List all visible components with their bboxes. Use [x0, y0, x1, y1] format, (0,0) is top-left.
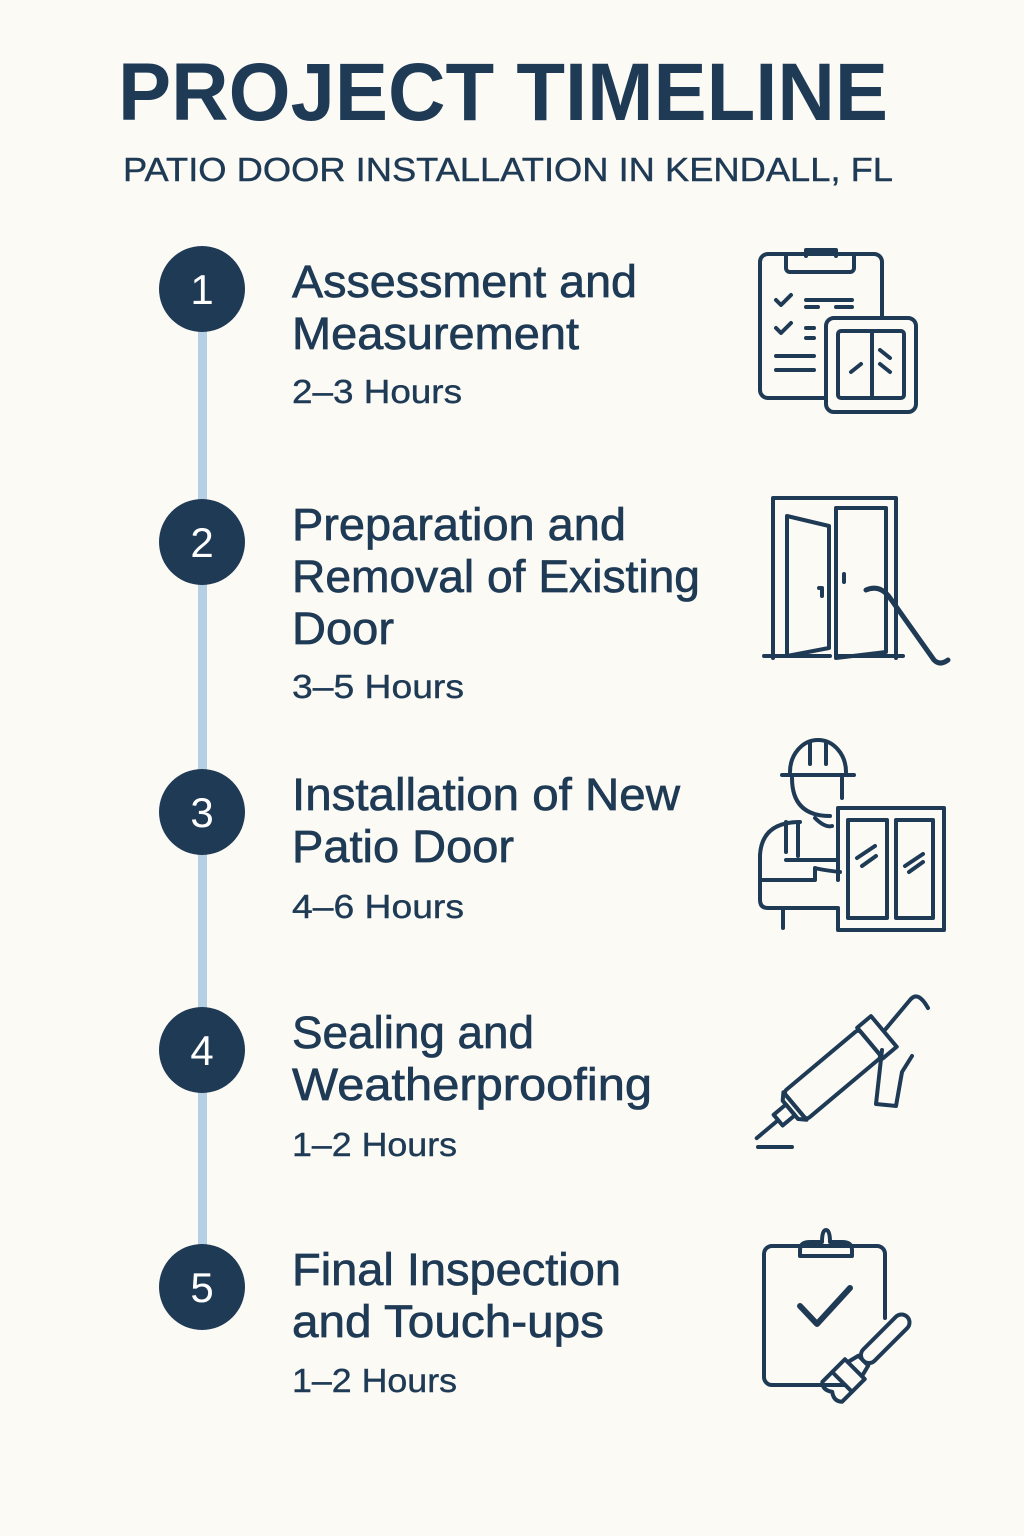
step 1: Assessment and — [292, 256, 637, 307]
timeline line — [198, 289, 207, 1287]
step 2: Preparation and — [292, 499, 626, 550]
step 1: 2–3 Hours — [292, 373, 462, 410]
icon: caulk gun — [744, 996, 928, 1153]
step 1: 1 — [190, 266, 214, 313]
step 2: 2 — [190, 519, 214, 566]
step 4: 4 — [190, 1027, 214, 1074]
step 2: Door — [292, 603, 394, 654]
step 5: Final Inspection — [292, 1244, 621, 1295]
step 2: 3–5 Hours — [292, 668, 464, 705]
step 3: Installation of New — [292, 769, 681, 820]
icon: worker with window — [760, 740, 944, 930]
step 5: 5 — [190, 1264, 214, 1311]
step 4: 1–2 Hours — [292, 1126, 457, 1163]
step 5: and Touch-ups — [292, 1296, 604, 1347]
step 3: Patio Door — [292, 821, 514, 872]
step 4: Sealing and — [292, 1007, 534, 1058]
subtitle: PATIO DOOR INSTALLATION IN KENDALL, FL — [123, 151, 893, 188]
step 4: Weatherproofing — [292, 1059, 652, 1110]
step 2 — [159, 499, 700, 705]
step 5 — [159, 1244, 621, 1399]
step 5: 1–2 Hours — [292, 1362, 457, 1399]
title: PROJECT TIMELINE — [118, 47, 888, 138]
icon: clipboard with brush — [764, 1230, 917, 1404]
step 1: Measurement — [292, 308, 580, 359]
step 3: 4–6 Hours — [292, 888, 464, 925]
step 3 — [159, 769, 681, 925]
step 2: Removal of Existing — [292, 551, 700, 602]
step 4 — [159, 1007, 652, 1163]
step 3: 3 — [190, 789, 214, 836]
step 1 — [159, 246, 637, 410]
icon: door removal — [764, 498, 948, 663]
icon: clipboard and window — [760, 250, 916, 412]
